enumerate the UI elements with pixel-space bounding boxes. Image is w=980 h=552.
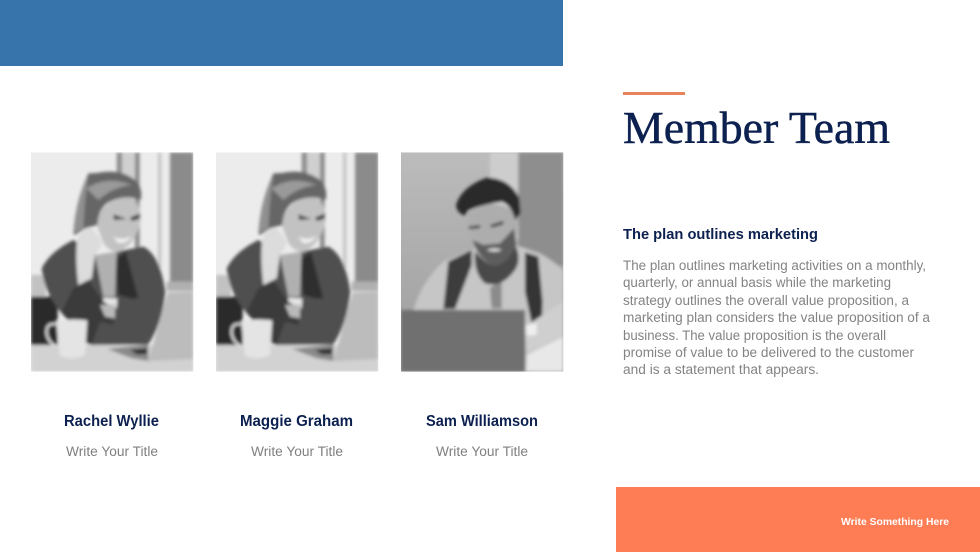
role: Maggie Graham: Write Your Title [251,444,343,459]
body paragraph: promise of value to be delivered to the customer [623,345,915,360]
body paragraph: business. The value proposition is the overall [623,328,886,343]
top blue banner [0,0,563,66]
accent line [623,92,685,95]
photo: Sam Williamson [401,152,563,372]
team member: Rachel Wyllie [31,152,193,459]
photo: Rachel Wyllie [31,152,193,372]
role: Rachel Wyllie: Write Your Title [66,444,158,459]
team member: Sam Williamson [401,152,563,459]
subheading: The plan outlines marketing [623,226,818,243]
body paragraph: marketing plan considers the value proposition of a [623,310,930,325]
name: Rachel Wyllie: Rachel Wyllie [64,413,159,430]
role: Sam Williamson: Write Your Title [436,444,528,459]
title: Member Team [623,102,890,153]
body paragraph: quarterly, or annual basis while the marketing [623,275,891,290]
title block [623,92,890,153]
team member: Maggie Graham [216,152,378,459]
footer text: Write Something Here [841,516,949,528]
photo: Maggie Graham [216,152,378,372]
body paragraph: The plan outlines marketing activities on a monthly, [623,258,926,273]
name: Maggie Graham: Maggie Graham [240,413,353,430]
body paragraph: strategy outlines the overall value proposition, a [623,293,909,308]
name: Sam Williamson: Sam Williamson [426,413,538,430]
body paragraph: and is a statement that appears. [623,362,819,377]
body paragraph [623,258,930,377]
footer panel [616,487,980,552]
